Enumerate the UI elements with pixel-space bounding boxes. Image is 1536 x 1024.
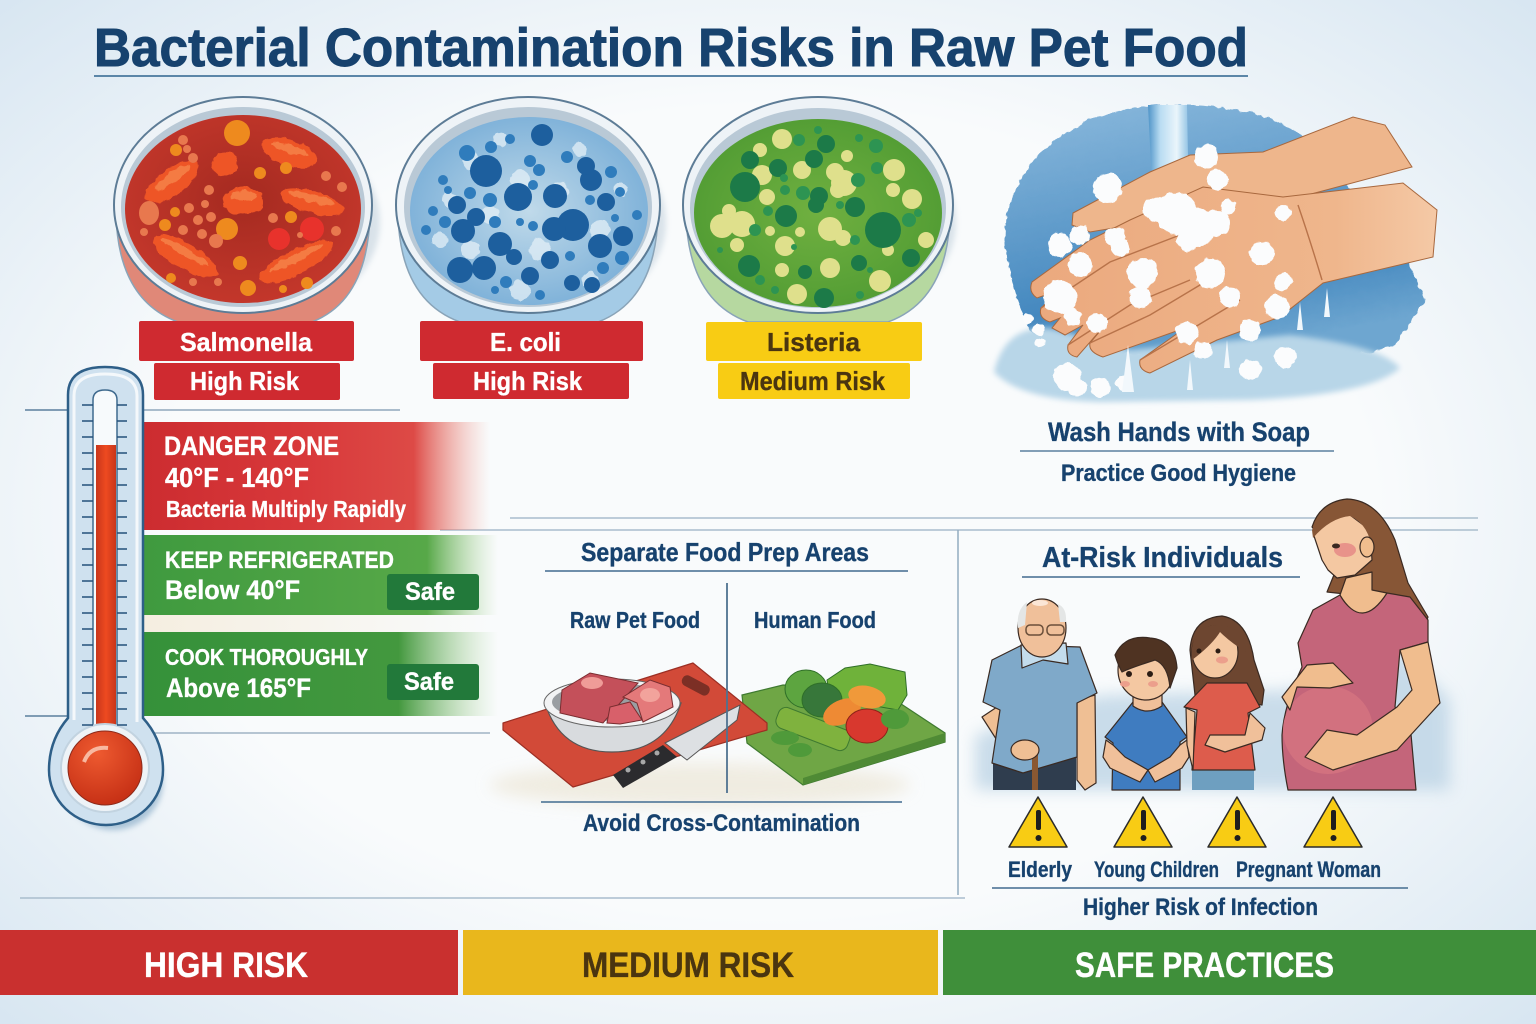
bowl [545, 703, 681, 752]
label: Salmonella High Risk: Salmonella [180, 327, 313, 357]
label: Listeria Medium Risk [706, 322, 922, 399]
group labels: Elderly [1008, 857, 1073, 882]
wash hands caption: Wash Hands with Soap [1048, 417, 1310, 447]
legend bar: high risk: HIGH RISK [144, 946, 308, 985]
panel: cook thoroughly: COOK THOROUGHLY [165, 644, 368, 670]
soap foam [1023, 145, 1296, 397]
safe badge: Safe [404, 668, 454, 696]
panel: danger zone [143, 422, 490, 530]
bacteria colonies: Listeria [710, 126, 934, 308]
red cutting board with meat and knife [503, 663, 767, 788]
group labels [1008, 857, 1381, 882]
green cutting board with vegetables [742, 664, 945, 785]
legend bar: medium risk [463, 930, 938, 995]
legend bar: medium risk: MEDIUM RISK [582, 946, 794, 985]
thermometer [49, 367, 163, 830]
raw pet food label: Raw Pet Food [570, 607, 700, 633]
wash hands caption: Practice Good Hygiene [1061, 460, 1296, 487]
legend bar: safe practices: SAFE PRACTICES [1075, 946, 1334, 985]
front hand [1031, 183, 1437, 373]
safe badge [387, 664, 479, 700]
panel: danger zone: Bacteria Multiply Rapidly [166, 496, 406, 522]
water droplets [1122, 288, 1330, 392]
knife [665, 705, 740, 760]
higher risk caption: Higher Risk of Infection [1083, 894, 1318, 921]
panel: separate food prep areas [490, 537, 945, 837]
title: Bacterial Contamination Risks in Raw Pet Food [94, 18, 1248, 78]
safe badge: Safe [405, 578, 455, 606]
finger creases [1041, 205, 1322, 360]
heading: at-risk individuals: At-Risk Individuals [1042, 542, 1283, 574]
young boy [1103, 637, 1189, 790]
countertop wash [490, 763, 910, 807]
label: Listeria Medium Risk: Medium Risk [740, 366, 885, 396]
label: Listeria Medium Risk: Listeria [767, 327, 861, 357]
warning: elderly [1009, 797, 1067, 847]
bacteria colonies: E. coli [421, 124, 642, 300]
warning: child two [1208, 797, 1266, 847]
panel: Listeria petri dish [683, 97, 956, 322]
legend bar: high risk [0, 930, 458, 995]
label: E. coli High Risk [420, 321, 643, 399]
label: Salmonella High Risk [139, 321, 354, 400]
label: Salmonella High Risk: High Risk [190, 366, 299, 396]
safe badge [387, 574, 479, 610]
label: E. coli High Risk: High Risk [473, 366, 582, 396]
divider [726, 583, 728, 793]
panel: keep refrigerated [143, 535, 498, 615]
hands illustration [1023, 117, 1437, 397]
young girl [1184, 616, 1265, 790]
elderly man [982, 599, 1097, 790]
water wash background [1005, 105, 1425, 370]
panel: E. coli petri dish [396, 97, 666, 322]
panel: danger zone: 40°F - 140°F [165, 462, 309, 493]
human food label: Human Food [754, 607, 876, 633]
group labels: Pregnant Woman [1236, 857, 1381, 882]
wash hands caption [1020, 417, 1334, 487]
thermometer ticks [82, 405, 127, 725]
water stream [1148, 105, 1189, 205]
water pool [994, 328, 1400, 402]
panel: danger zone: DANGER ZONE [164, 431, 339, 461]
warning icons and labels [1008, 797, 1381, 882]
back hand [1072, 117, 1412, 232]
panel: keep refrigerated: Below 40°F [165, 575, 300, 605]
panel: cook thoroughly: Above 165°F [166, 673, 311, 703]
panel: cook thoroughly [143, 632, 498, 716]
label: E. coli High Risk: E. coli [490, 327, 561, 357]
panel: at-risk individuals [975, 499, 1450, 921]
legend bar: safe practices [943, 930, 1536, 995]
warning: young child [1114, 797, 1172, 847]
warning: pregnant woman [1304, 797, 1362, 847]
panel: Salmonella petri dish [114, 97, 380, 322]
pregnant woman [1282, 499, 1440, 790]
group labels: Young Children [1094, 857, 1219, 882]
heading: separate food prep: Separate Food Prep Areas [581, 537, 869, 567]
panel: wash hands [994, 105, 1437, 402]
blue wash behind people [975, 650, 1450, 790]
avoid cross contamination caption: Avoid Cross-Contamination [583, 810, 860, 837]
panel: keep refrigerated: KEEP REFRIGERATED [165, 547, 394, 574]
bacteria colonies: Salmonella [139, 120, 347, 296]
